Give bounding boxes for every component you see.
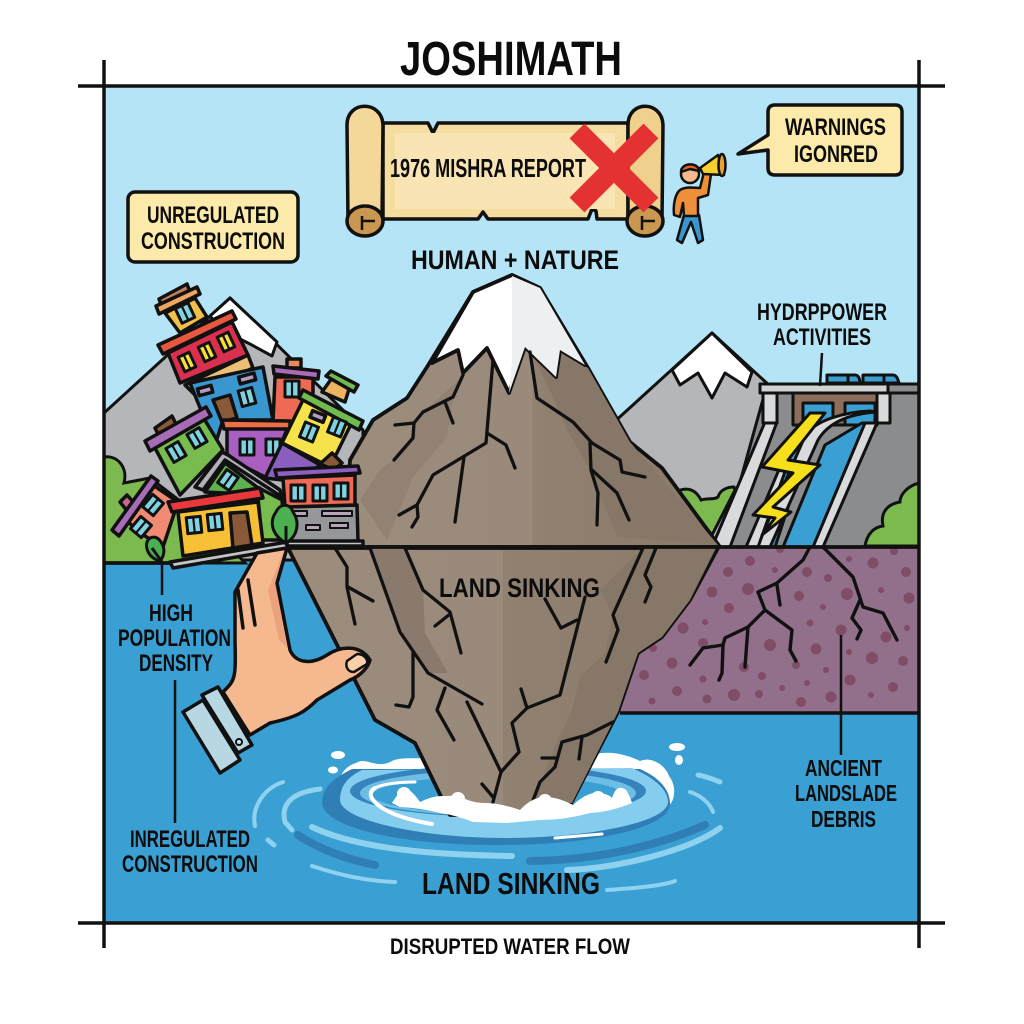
ripple arcs xyxy=(254,775,720,890)
ancient landslide debris label: DEBRIS xyxy=(811,806,876,832)
central mountain above ground xyxy=(345,275,720,547)
bottom yellow house xyxy=(168,488,263,556)
lightning bolt xyxy=(753,413,825,535)
upper mountain shading xyxy=(360,350,718,545)
ancient landslide debris label xyxy=(795,635,897,832)
tilted colourful houses xyxy=(112,284,363,568)
lower unregulated construction label: INREGULATED xyxy=(130,826,250,853)
curved pipe xyxy=(757,411,877,547)
front water foam xyxy=(392,787,632,823)
land sinking bottom label: LAND SINKING xyxy=(422,866,600,901)
left roller xyxy=(347,106,383,222)
salmon house xyxy=(273,359,319,422)
left channel wall xyxy=(712,422,777,547)
person with megaphone xyxy=(674,154,726,243)
left salmon house xyxy=(112,476,178,547)
shirt cuff xyxy=(202,687,252,753)
human + nature label: HUMAN + NATURE xyxy=(411,245,619,275)
lower unregulated construction label: CONSTRUCTION xyxy=(122,851,258,878)
inner pale ring xyxy=(360,770,636,816)
frame lines xyxy=(78,60,945,948)
red house xyxy=(158,311,248,383)
warnings speech bubble xyxy=(738,105,902,175)
sky background xyxy=(104,86,919,556)
tan wall xyxy=(185,355,253,395)
right background mountain xyxy=(612,333,770,547)
high population density label xyxy=(118,563,231,677)
land sinking middle label: LAND SINKING xyxy=(439,573,600,603)
hydropower label: ACTIVITIES xyxy=(773,324,871,351)
hand holding the platform xyxy=(183,548,370,773)
dam wall xyxy=(722,392,919,547)
dark ripple xyxy=(322,769,670,845)
unregulated construction label xyxy=(128,192,298,262)
scroll body xyxy=(383,123,628,219)
ground line xyxy=(287,545,919,549)
report title: 1976 MISHRA REPORT xyxy=(390,153,586,183)
warnings speech bubble: WARNINGS xyxy=(785,114,886,141)
tree right xyxy=(272,505,297,545)
green house xyxy=(145,407,223,495)
inner water xyxy=(373,776,623,814)
left background mountain xyxy=(104,298,363,560)
hydropower dam xyxy=(712,375,919,547)
dam deck xyxy=(888,384,919,393)
small green house xyxy=(195,452,285,540)
right roller xyxy=(628,106,663,222)
bright yellow house xyxy=(265,371,363,482)
hydropower label: HYDRPPOWER xyxy=(757,299,887,326)
dam brown wall xyxy=(793,393,877,425)
ancient landslide debris label: LANDSLADE xyxy=(795,780,897,806)
upper cracks xyxy=(394,352,645,527)
connector line xyxy=(174,680,176,823)
high population density label: POPULATION xyxy=(118,625,231,652)
report scroll xyxy=(347,106,663,236)
purple house xyxy=(222,420,290,478)
water channels xyxy=(756,425,815,547)
red cross xyxy=(577,131,651,205)
dam tanks xyxy=(827,375,899,383)
high population density label: DENSITY xyxy=(139,650,213,677)
green bush behind dam xyxy=(678,487,735,535)
right bush xyxy=(865,483,919,546)
palm shading xyxy=(268,553,287,648)
white foam ring back xyxy=(339,753,674,806)
ancient landslide debris label: ANCIENT xyxy=(805,755,882,781)
left green hill xyxy=(104,457,245,563)
thumb nail xyxy=(346,654,367,672)
right salmon and stone house xyxy=(275,466,360,543)
platform xyxy=(170,542,288,568)
spray drops xyxy=(328,743,685,774)
snow cap xyxy=(432,275,585,393)
unregulated construction label: UNREGULATED xyxy=(147,202,279,229)
hydropower label xyxy=(757,299,887,386)
lower cracks xyxy=(335,548,656,803)
inner dark ring xyxy=(350,765,646,817)
warnings speech bubble: IGONRED xyxy=(794,141,878,168)
blue house xyxy=(190,367,273,445)
lower mountain shading xyxy=(370,548,716,803)
water swirl xyxy=(254,743,720,890)
disrupted water flow caption: DISRUPTED WATER FLOW xyxy=(390,934,630,959)
tree left xyxy=(146,537,164,562)
light ripple xyxy=(340,768,668,838)
water background xyxy=(104,547,919,923)
scroll inner paper xyxy=(395,133,615,209)
ancient landslide debris xyxy=(620,545,919,713)
tower house xyxy=(156,284,207,333)
main title: JOSHIMATH xyxy=(400,33,622,86)
dam windows xyxy=(803,403,833,425)
unregulated construction label: CONSTRUCTION xyxy=(141,228,285,255)
right channel wall xyxy=(813,423,877,547)
high population density label: HIGH xyxy=(149,600,193,627)
lower unregulated construction label xyxy=(122,826,258,878)
central mountain below ground xyxy=(288,548,718,815)
